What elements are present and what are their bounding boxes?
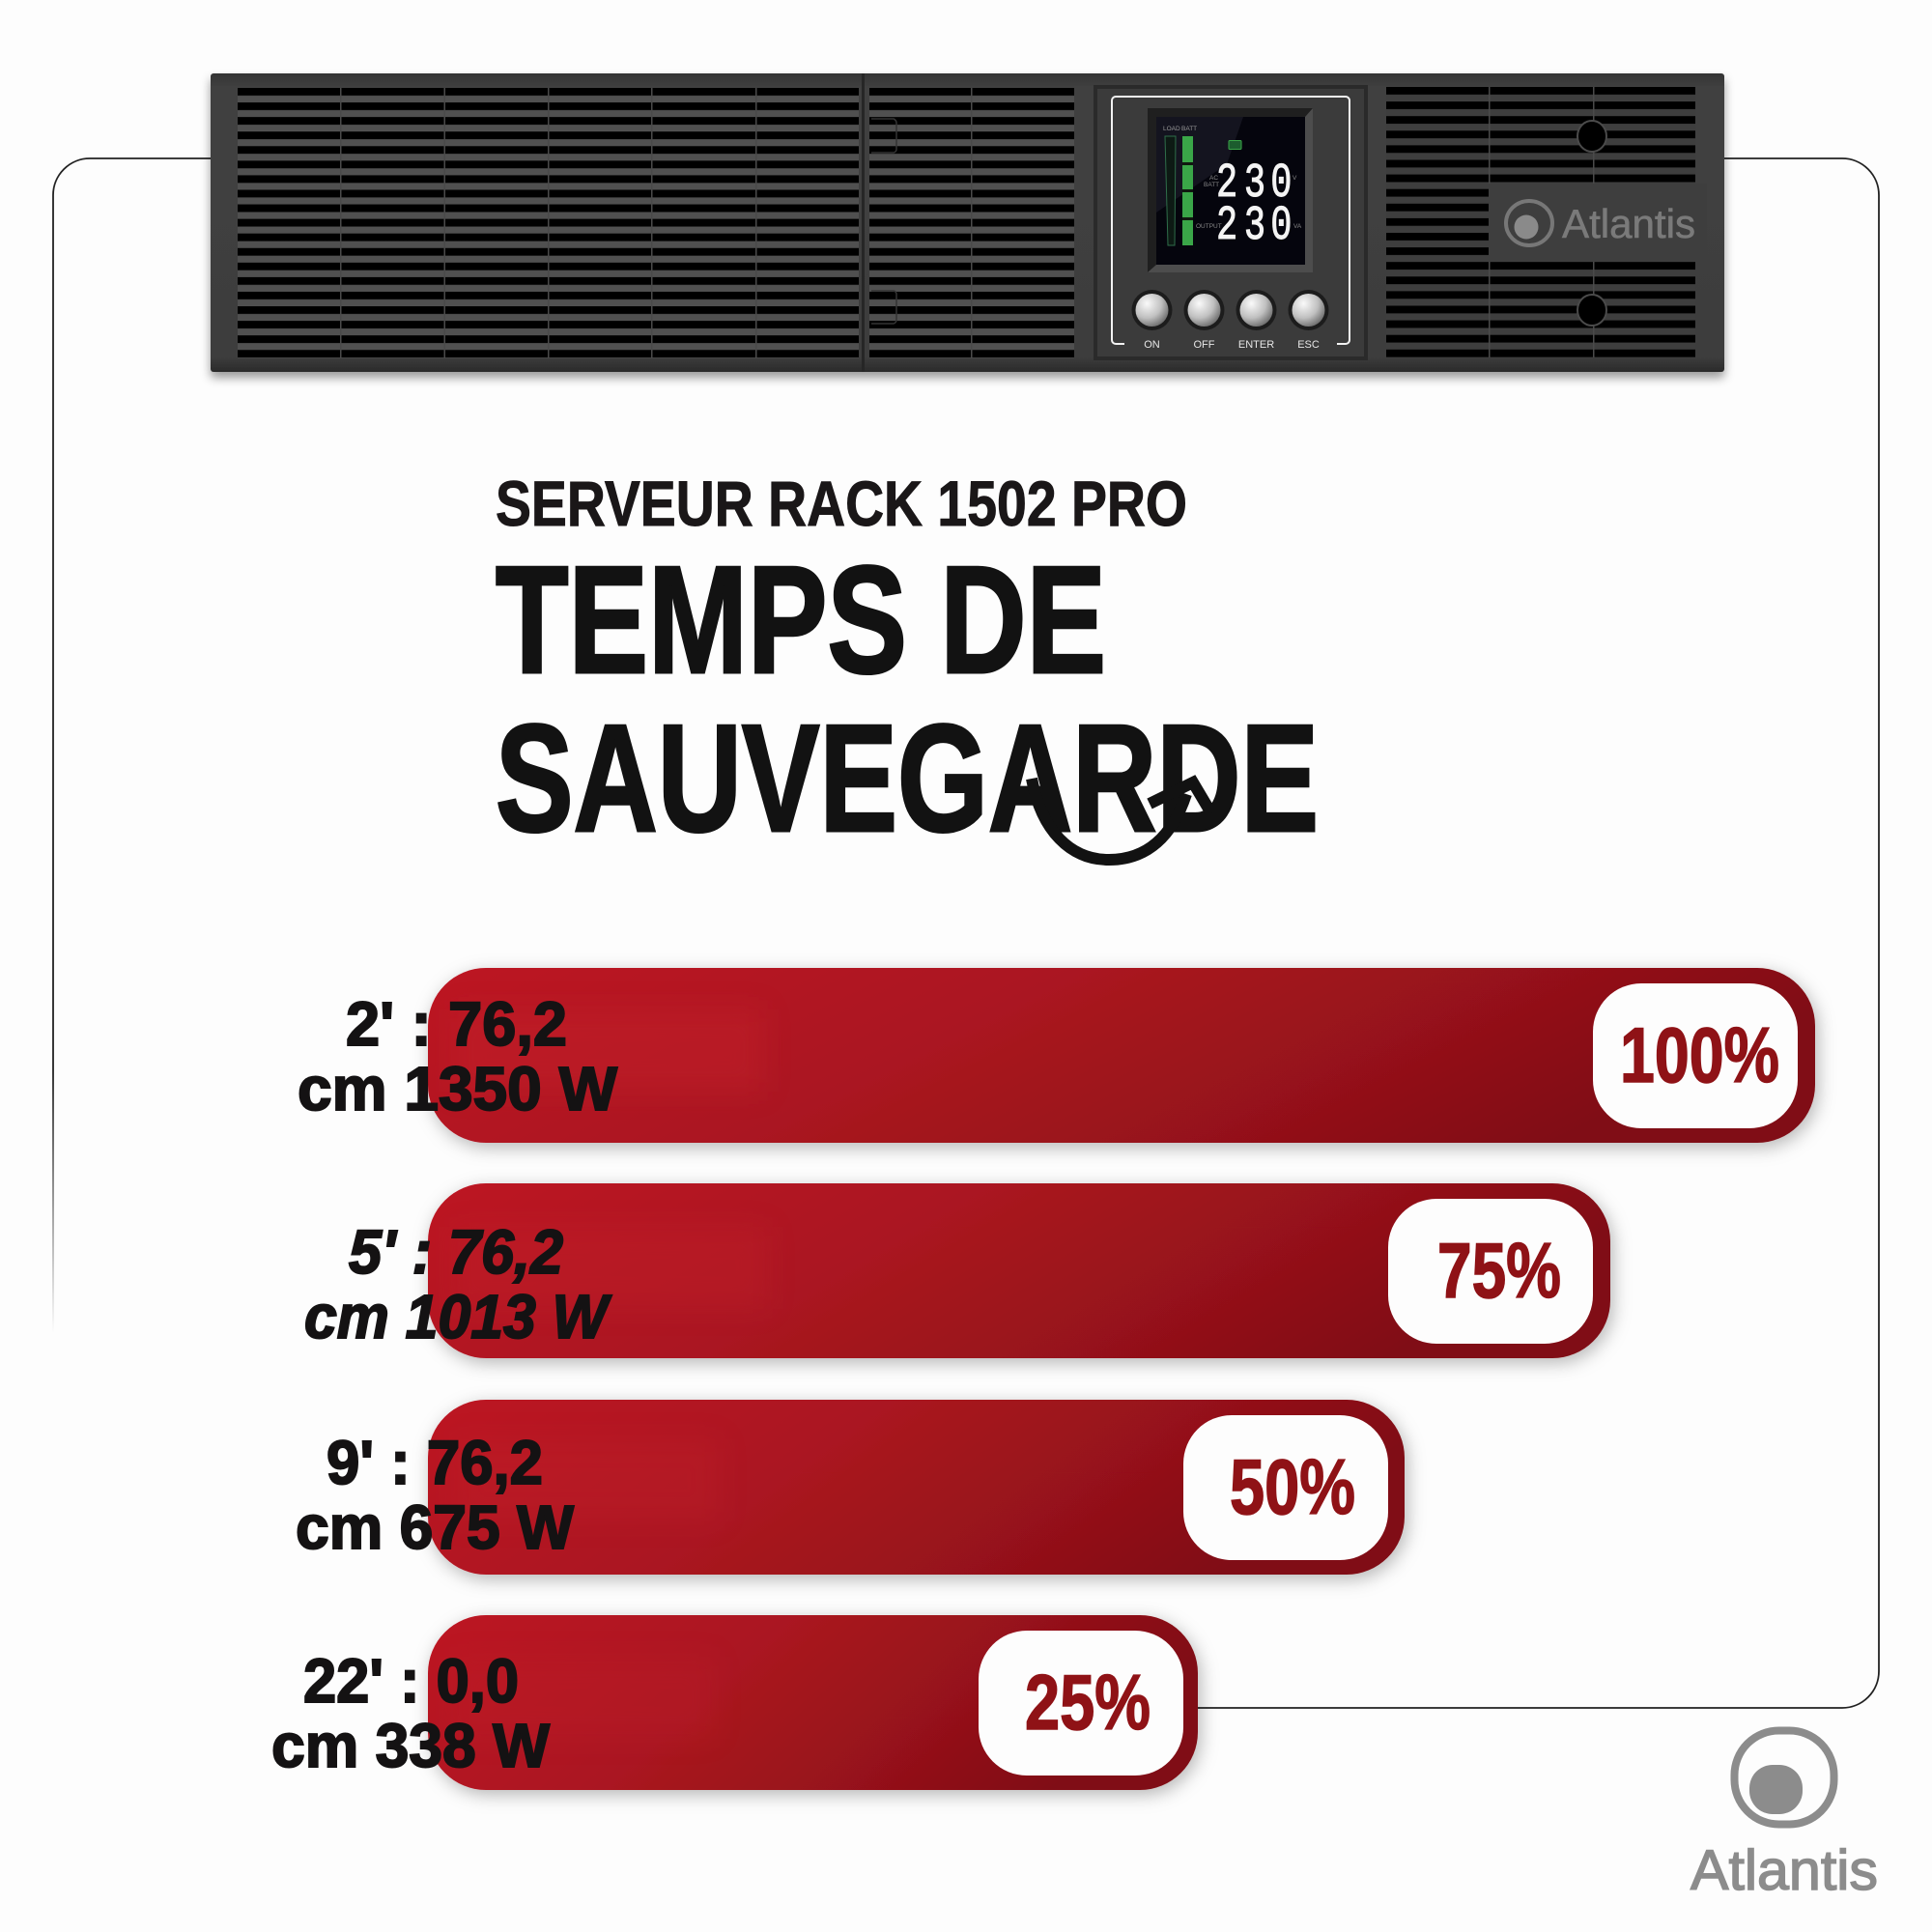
LCD screen: AC [1209, 175, 1218, 182]
battery icon [1229, 141, 1241, 149]
button labels: ESC [1297, 339, 1320, 351]
label: 25% load: 22' : 0,0 [303, 1646, 519, 1716]
pill [979, 1631, 1183, 1776]
buttons [1132, 290, 1329, 330]
title [496, 535, 1319, 864]
title: TEMPS DE [496, 535, 1106, 705]
left ventilation grille [238, 73, 1074, 372]
bar 50% [428, 1400, 1405, 1575]
label: 75% load: cm 1013 W [304, 1282, 611, 1351]
pill [1183, 1415, 1388, 1560]
highlight patch [454, 1009, 763, 1092]
LCD readings [1216, 156, 1292, 254]
load bar [1165, 136, 1176, 245]
button labels: ENTER [1238, 339, 1274, 351]
battery bar [1182, 136, 1193, 245]
value: 25% [1025, 1660, 1151, 1747]
panel outline [52, 158, 1879, 1708]
label: 100% load [298, 989, 618, 1123]
button labels [1144, 339, 1320, 351]
label: 25% load [271, 1646, 551, 1780]
button labels: OFF [1194, 339, 1215, 351]
bar 100% [428, 968, 1815, 1143]
LCD screen [1148, 108, 1313, 272]
screw holes [1577, 121, 1606, 152]
label: 75% load: 5' : 76,2 [349, 1217, 563, 1287]
rack Atlantis logo: Atlantis [1562, 201, 1695, 246]
highlight patch [454, 1439, 720, 1521]
LCD screen: BATT [1204, 182, 1219, 188]
bar 25% [428, 1615, 1198, 1790]
LCD readings: 230 [1216, 156, 1292, 212]
Atlantis logo [1690, 1731, 1878, 1902]
LCD screen: LOAD [1163, 126, 1180, 132]
LCD screen: V [1293, 175, 1297, 182]
title: SAUVEGARDE [496, 694, 1319, 864]
label: 100% load: 2' : 76,2 [346, 989, 567, 1059]
rack logo plate [1489, 184, 1707, 262]
UPS rack unit [211, 73, 1724, 372]
value: 75% [1437, 1228, 1561, 1315]
subtitle: SERVEUR RACK 1502 PRO [496, 468, 1187, 539]
pill [1388, 1199, 1593, 1344]
label: 50% load: 9' : 76,2 [327, 1428, 543, 1497]
LCD screen: OUTPUT [1196, 223, 1222, 230]
right ventilation grille [1386, 87, 1707, 357]
highlight patch [454, 1657, 715, 1739]
white bracket [1112, 97, 1350, 344]
label: 75% load [304, 1217, 611, 1351]
label: 50% load: cm 675 W [296, 1492, 575, 1562]
value: 100% [1620, 1012, 1779, 1099]
rack body [211, 73, 1724, 372]
label: 25% load: cm 338 W [271, 1711, 551, 1780]
logo wordmark: Atlantis [1690, 1839, 1878, 1902]
LCD screen: BATT [1181, 126, 1197, 132]
pill [1593, 983, 1798, 1128]
LCD readings: 230 [1216, 199, 1292, 254]
label: 100% load: cm 1350 W [298, 1054, 618, 1123]
highlight patch [454, 1227, 768, 1309]
logo mark [1735, 1731, 1833, 1824]
LCD screen: VA [1293, 223, 1302, 230]
control panel [1095, 87, 1366, 358]
button labels: ON [1144, 339, 1160, 351]
value: 50% [1230, 1444, 1355, 1531]
label: 50% load [296, 1428, 575, 1562]
bar 75% [428, 1183, 1610, 1358]
icon: clock arc with arrow [1032, 779, 1211, 860]
